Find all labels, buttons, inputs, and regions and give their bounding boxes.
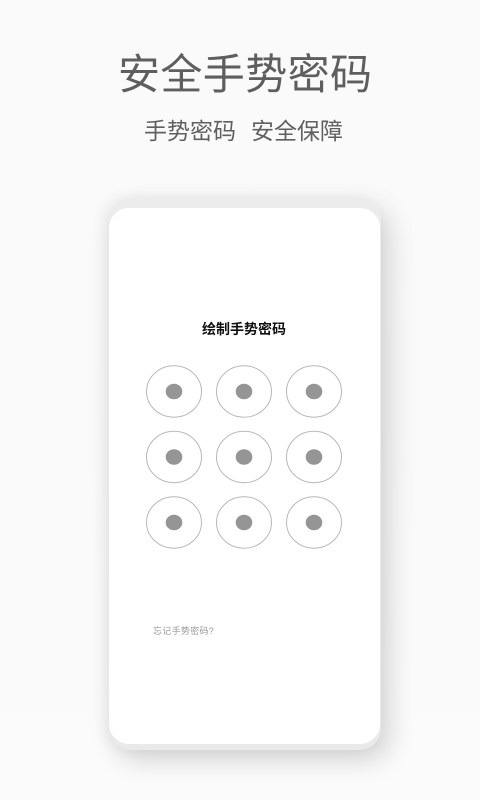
subtitle [144,118,343,144]
title: 安全手势密码 [118,51,372,98]
screen heading: 绘制手势密码 [202,321,286,337]
forgot password link: 忘记手势密码? [153,626,214,636]
subtitle: 安全保障 [251,118,343,144]
phone screen [109,208,380,744]
phone body shadow [109,198,381,750]
gesture pattern grid [146,365,342,549]
subtitle: 手势密码 [144,118,236,144]
